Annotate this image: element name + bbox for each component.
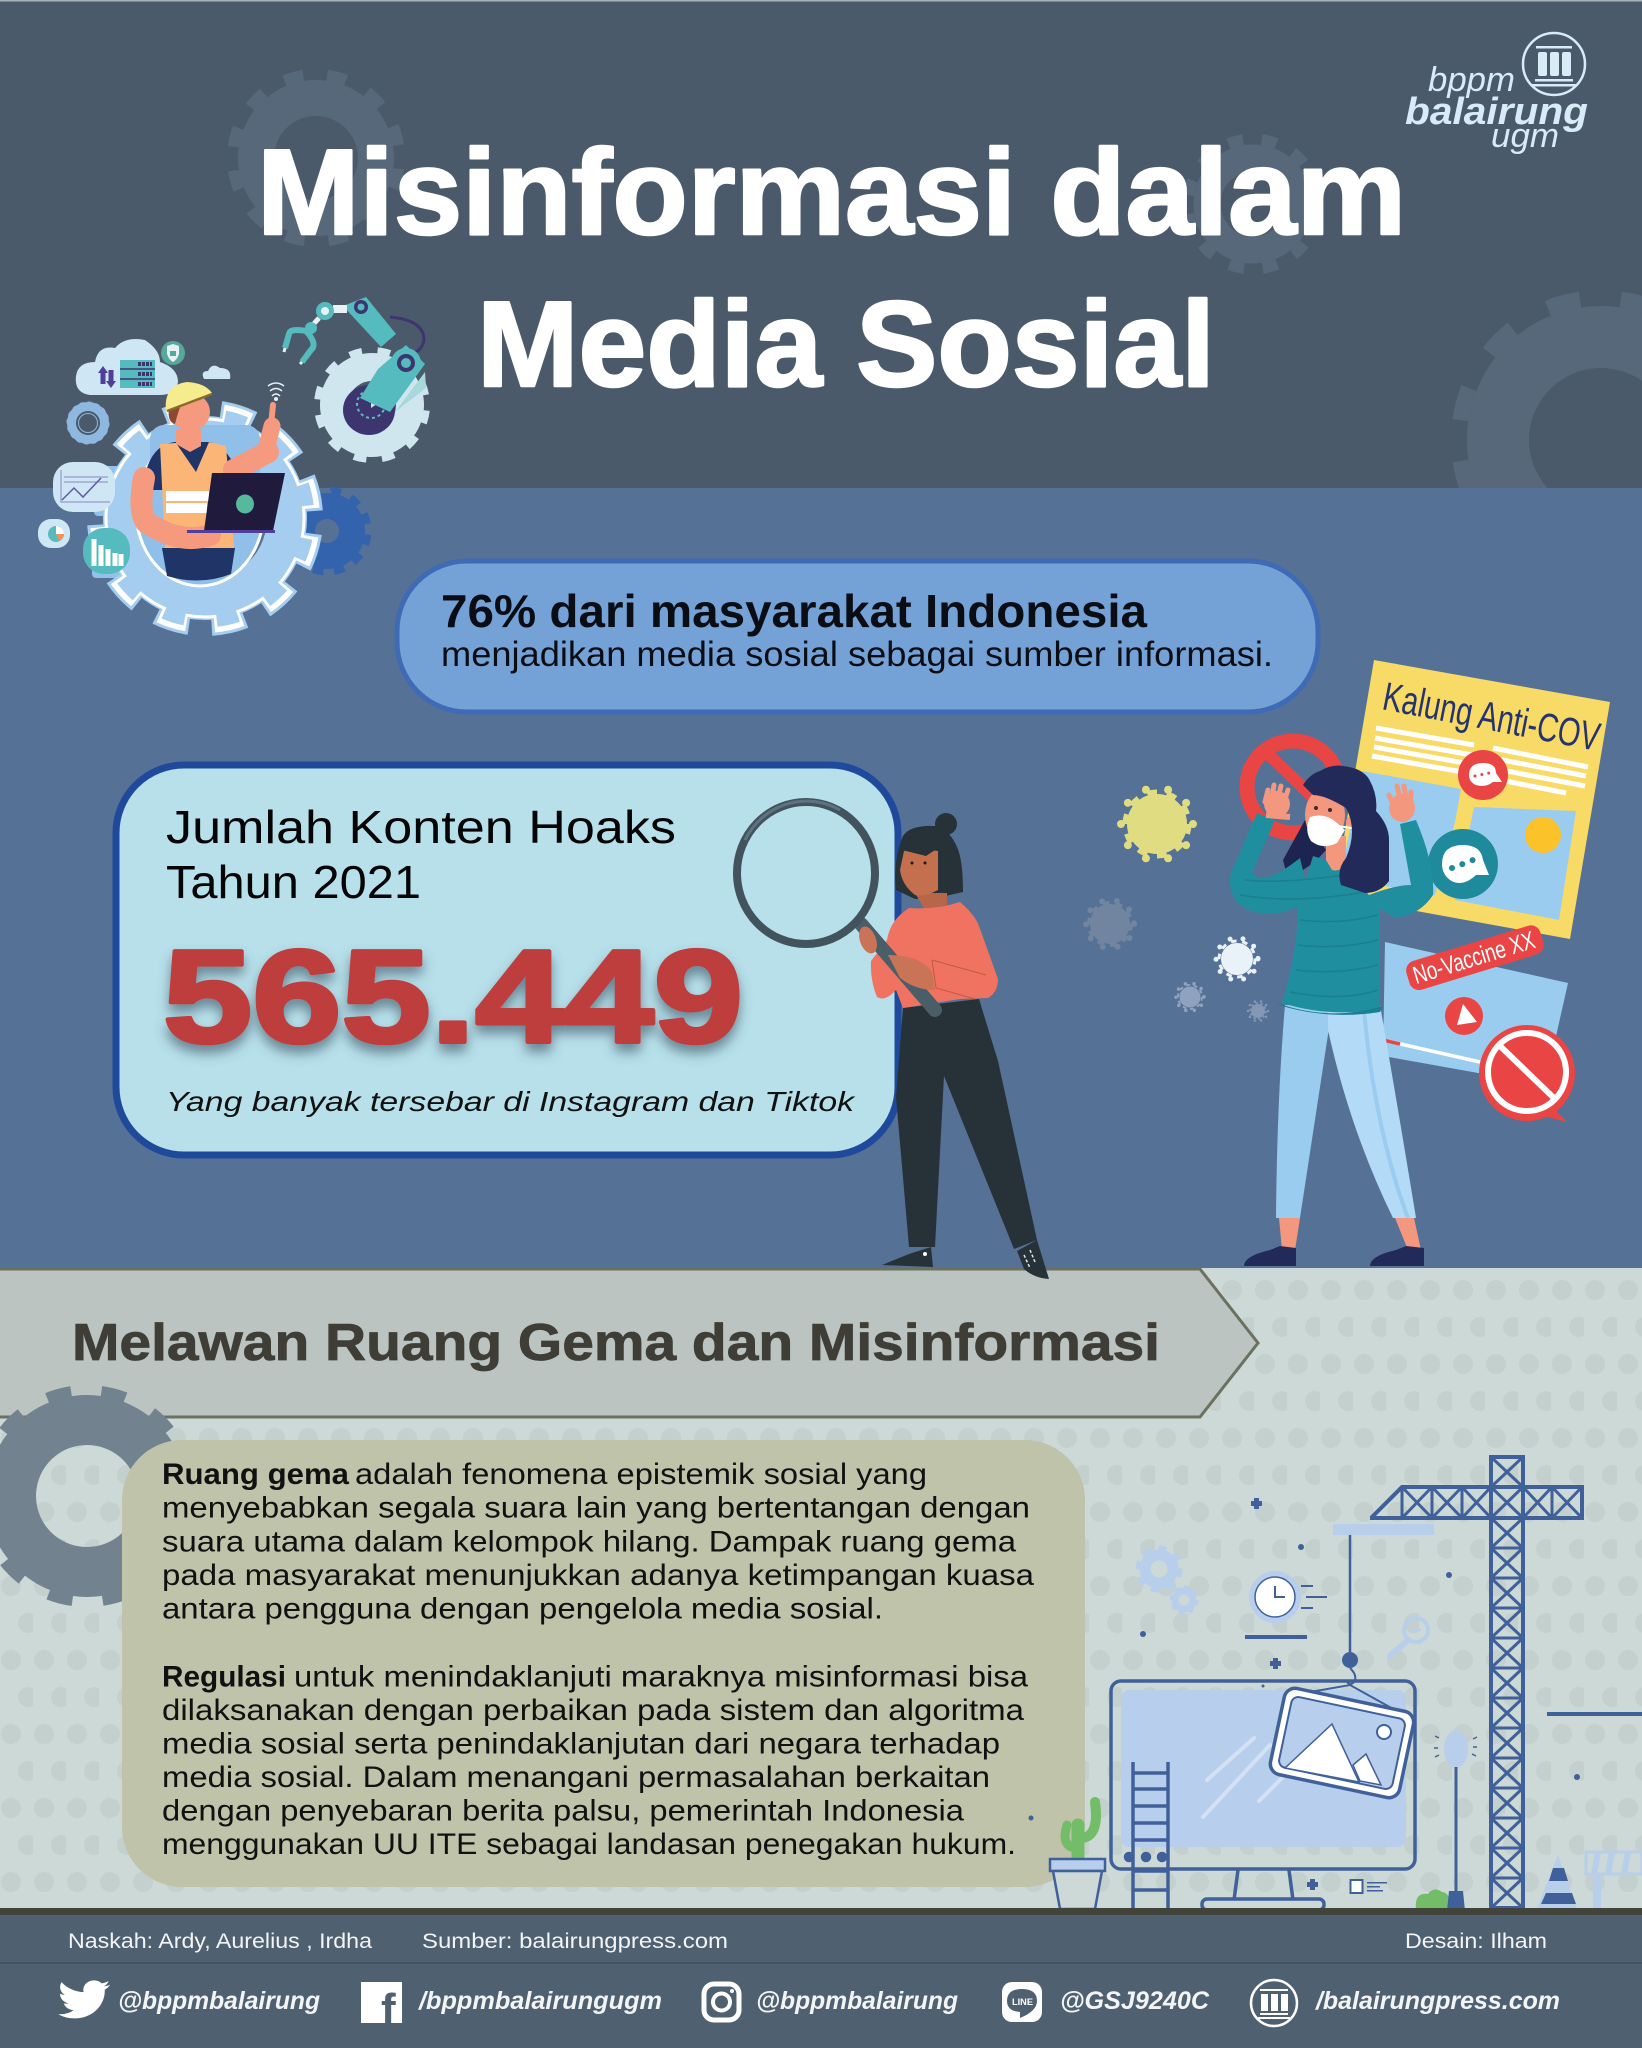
icon: clock (1245, 1571, 1327, 1637)
icon: hanging picture (1268, 1685, 1416, 1800)
title: Misinformasi dalam (257, 124, 1406, 260)
text block: ruang gema: adalah fenomena epistemik sosial yang (355, 1458, 927, 1491)
icon: small virus (1248, 1001, 1268, 1021)
illustration: blue gear behind worker (283, 487, 371, 575)
icon: light gears (1138, 1548, 1197, 1613)
icon: bush and lamp (1416, 1730, 1477, 1911)
logo: bppm balairung ugm: bppm (1428, 61, 1515, 99)
logo: bppm balairung ugm: ugm (1491, 117, 1559, 155)
panel: hoax content count (116, 765, 898, 1155)
text block: regulasi: menggunakan UU ITE sebagai landasan penegakan hukum. (162, 1828, 1016, 1861)
callout: 76 percent statistic: menjadikan media sosial sebagai sumber informasi. (441, 635, 1273, 674)
illustration: video panel (1383, 923, 1575, 1122)
text block: regulasi: untuk menindaklanjuti maraknya misinformasi bisa (294, 1660, 1028, 1693)
text block: ruang gema: suara utama dalam kelompok hilang. Dampak ruang gema (162, 1525, 1016, 1558)
icon: header gear centre (1180, 131, 1326, 277)
illustration: robot arm on gear (284, 297, 431, 464)
logo: bppm balairung ugm: balairung (1405, 91, 1588, 133)
caption: Yang banyak tersebar di Instagram dan Tiktok (166, 1086, 856, 1117)
icon: gray virus (1086, 900, 1134, 948)
heading: hoax count: Tahun 2021 (166, 856, 421, 908)
icon: facebook (361, 1982, 402, 2034)
text block: ruang gema: antara pengguna dengan pengelola media sosial. (162, 1593, 883, 1626)
big number: 565.449 (163, 923, 743, 1070)
credits (68, 1930, 1547, 1953)
callout: 76 percent statistic (397, 561, 1318, 712)
illustration: fake news poster (1334, 660, 1610, 939)
text block: regulasi (162, 1660, 1028, 1861)
illustration: construction scene (1028, 1457, 1642, 1911)
logo: bppm balairung ugm (1405, 33, 1588, 155)
heading: hoax count: Jumlah Konten Hoaks (166, 801, 676, 853)
text block: ruang gema: Ruang gema (162, 1458, 349, 1491)
text block: regulasi: dilaksanakan dengan perbaikan pada sistem dan algoritma (162, 1694, 1024, 1727)
text block: ruang gema (162, 1458, 1034, 1626)
icon: white virus (1216, 938, 1258, 980)
illustration: woman with magnifying glass (737, 801, 1049, 1279)
text block: regulasi: dengan penyebaran berita palsu, pemerintah Indonesia (162, 1794, 964, 1828)
icon: hoist cable and hook (1333, 1524, 1434, 1684)
social: line handle: @GSJ9240C (1060, 1987, 1210, 2015)
icon: road barrier (1586, 1852, 1642, 1910)
text block: ruang gema: pada masyarakat menunjukkan adanya ketimpangan kuasa (162, 1559, 1034, 1592)
credits: Naskah: Ardy, Aurelius , Irdha (68, 1930, 372, 1953)
title: Media Sosial (477, 276, 1215, 412)
text block: regulasi: media sosial. Dalam menangani permasalahan berkaitan (162, 1761, 990, 1794)
icon: large gear lower left (0, 1377, 206, 1615)
title (257, 124, 1406, 412)
panel: header background (0, 0, 1642, 600)
social: twitter handle: @bppmbalairung (118, 1987, 320, 2015)
decorative specks (1028, 1498, 1642, 1892)
illustration: data bubbles (38, 462, 130, 574)
icon: instagram (704, 1984, 739, 2020)
panel: light lower background (0, 1268, 1642, 1910)
illustration: coronavirus particles (1086, 788, 1268, 1021)
callout: 76 percent statistic: 76% dari masyarakat Indonesia (441, 585, 1147, 637)
credits: Sumber: balairungpress.com (422, 1930, 728, 1953)
footer panel (0, 1908, 1642, 2048)
icon: light magnifier (1390, 1618, 1428, 1656)
illustration: cloud and server icons (76, 339, 230, 395)
tag: No-Vaccine: No-Vaccine XX (1410, 926, 1539, 990)
icon: pale virus (1176, 983, 1204, 1011)
text block: regulasi: Regulasi (162, 1660, 286, 1693)
illustration: target gear icon (68, 403, 108, 443)
icon: twitter (58, 1980, 110, 2018)
illustration: worker with laptop inside gear (79, 382, 331, 644)
icon: line: LINE (1012, 1997, 1033, 2007)
icon: traffic cone (1537, 1855, 1577, 1909)
icon: header gear left (222, 64, 410, 252)
text block: regulasi: media sosial serta penindaklanjutan dari negara terhadap (162, 1728, 1000, 1760)
icon: monitor (1111, 1681, 1415, 1910)
icon: header gear right (1441, 280, 1642, 600)
icon: ladder (1126, 1762, 1168, 1908)
text block: ruang gema: menyebabkan segala suara lain yang bertentangan dengan (162, 1492, 1030, 1525)
tag: No-Vaccine (1404, 923, 1546, 993)
panel: explanatory text box (122, 1440, 1085, 1887)
icon: facebook: f (381, 1985, 396, 2034)
icon: crane (1372, 1457, 1582, 1908)
credits: Desain: Ilham (1405, 1930, 1547, 1953)
icon: yellow virus (1121, 788, 1193, 860)
social: instagram handle: @bppmbalairung (756, 1987, 958, 2015)
panel: blue middle background (0, 488, 1642, 1268)
icon: line (1002, 1982, 1042, 2022)
icon: stop bubble (1479, 1025, 1575, 1122)
banner: section heading: Melawan Ruang Gema dan Misinformasi (72, 1314, 1160, 1372)
icon: balairung logo (1251, 1980, 1297, 2026)
banner: section heading (0, 1269, 1258, 1417)
social: facebook handle: /bppmbalairungugm (418, 1987, 662, 2015)
social: website: /balairungpress.com (1315, 1987, 1560, 2015)
heading: hoax count (166, 801, 676, 908)
illustration: woman with mask (1230, 741, 1433, 1266)
icon: cactus in pot (1050, 1802, 1105, 1909)
